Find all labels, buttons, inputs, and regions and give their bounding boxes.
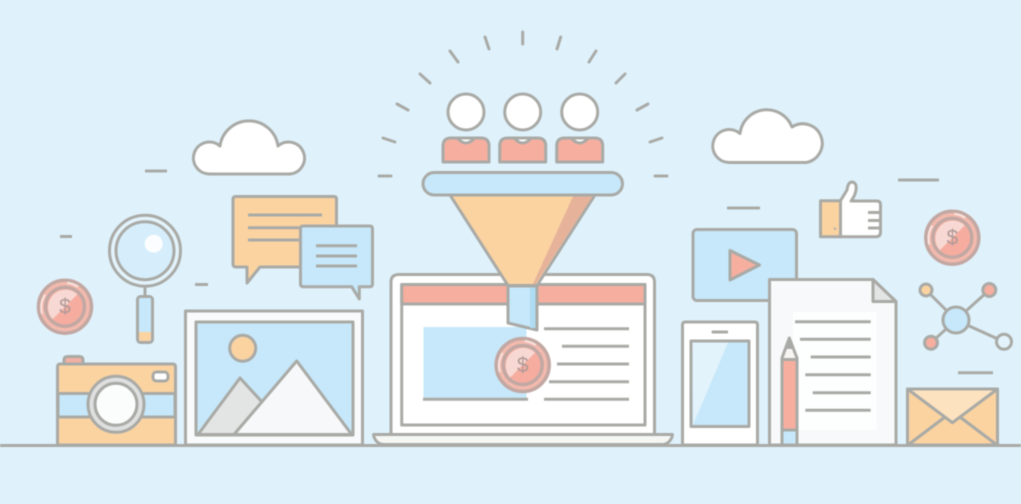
funnel cone shade: [533, 196, 592, 284]
laptop base: [374, 434, 672, 444]
laptop title bar: [402, 284, 645, 304]
icon: video player: [693, 230, 796, 300]
icon: document: [770, 280, 896, 445]
icon: magnifying glass: [110, 215, 180, 342]
icon: orange speech bubble: [233, 196, 336, 283]
icon: envelope: [908, 389, 998, 445]
person 1: [443, 94, 489, 162]
icon: funnel: [423, 172, 622, 330]
icon: phone: [682, 322, 758, 445]
ground line: [0, 444, 1021, 447]
blue content block: [424, 327, 526, 398]
icon: blue speech bubble: [300, 226, 372, 299]
decorative dashes: [60, 171, 993, 373]
funnel rim: [423, 172, 622, 195]
text lines: [423, 329, 629, 399]
icon: radiating rays above funnel: [379, 32, 667, 176]
icon: left cloud: [193, 121, 305, 174]
icon: thumbs up: [820, 182, 880, 237]
funnel cone: [450, 195, 595, 286]
person 3: [557, 94, 603, 162]
icon: pencil: [782, 337, 797, 445]
icon: camera: [58, 356, 176, 445]
funnel spout: [508, 286, 537, 330]
person 2: [500, 94, 546, 162]
icon: left coin: [38, 280, 92, 333]
icon: centre coin: [496, 338, 549, 392]
icon: right coin: $: [946, 227, 958, 250]
icon: network nodes: [920, 284, 1012, 349]
icon: left coin: $: [59, 296, 71, 319]
laptop screen: [402, 284, 645, 425]
icon: three people: [443, 94, 603, 162]
icon: right coin: [926, 211, 979, 264]
icon: centre coin: $: [517, 354, 529, 377]
icon: framed picture: [186, 311, 362, 445]
icon: laptop: [374, 274, 672, 444]
icon: right cloud: [713, 110, 822, 163]
